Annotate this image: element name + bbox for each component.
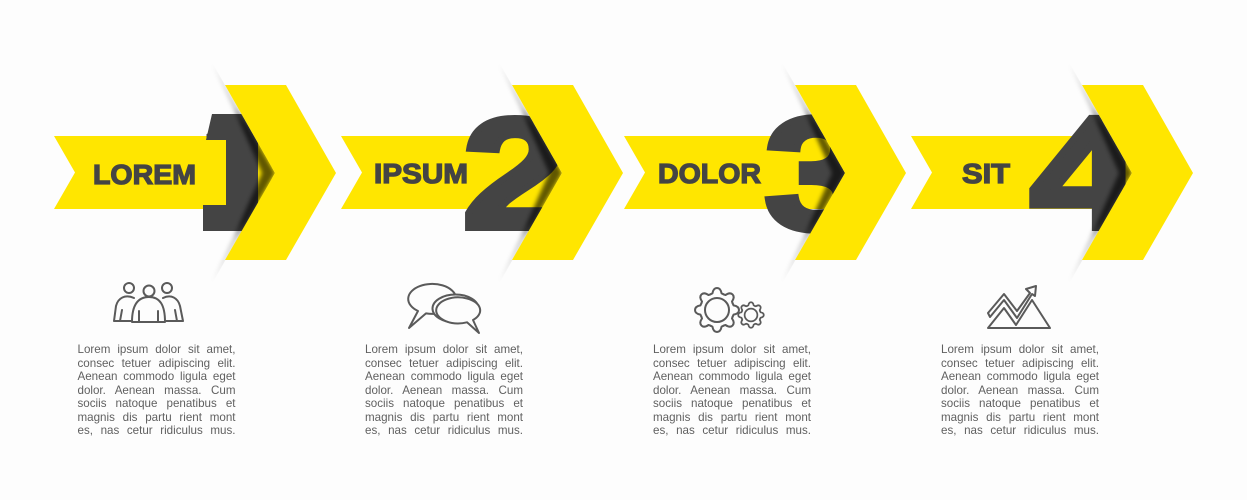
text block 2: Aenean commodo ligula eget bbox=[365, 370, 523, 383]
chevron head bbox=[1082, 85, 1193, 260]
step 3 arrow bbox=[624, 75, 906, 271]
text block 3: dolor. Aenean massa. Cum bbox=[653, 384, 811, 396]
text block 2: Lorem ipsum dolor sit amet, bbox=[365, 343, 523, 356]
fold shadow bbox=[788, 75, 845, 271]
small gear bbox=[738, 302, 764, 328]
text block 3: magnis dis partu rient mont bbox=[653, 410, 811, 424]
text block 3: sociis natoque penatibus et bbox=[653, 397, 811, 410]
text block 2: sociis natoque penatibus et bbox=[365, 397, 523, 410]
text block 4: dolor. Aenean massa. Cum bbox=[941, 384, 1099, 396]
text block 3 bbox=[653, 343, 811, 437]
number 2: 2 bbox=[462, 86, 569, 262]
text block 2: dolor. Aenean massa. Cum bbox=[365, 384, 523, 396]
label: IPSUM bbox=[374, 158, 468, 189]
text block 4: Aenean commodo ligula eget bbox=[941, 370, 1099, 383]
fold shadow bbox=[1075, 75, 1132, 271]
large gear bbox=[695, 288, 739, 332]
text block 1: magnis dis partu rient mont bbox=[78, 410, 236, 424]
number 3: 3 bbox=[764, 85, 871, 263]
fold shadow bbox=[505, 75, 562, 271]
label: DOLOR bbox=[658, 158, 761, 189]
text block 1: sociis natoque penatibus et bbox=[78, 397, 236, 410]
chevron head bbox=[225, 85, 336, 260]
text block 1: es, nas cetur ridiculus mus. bbox=[78, 424, 236, 437]
label: SIT bbox=[962, 158, 1010, 189]
text block 4 bbox=[941, 343, 1099, 437]
text block 4: consec tetuer adipiscing elit. bbox=[941, 356, 1099, 370]
text block 2: consec tetuer adipiscing elit. bbox=[365, 356, 523, 370]
ribbon tail bbox=[341, 136, 562, 209]
step 4 arrow bbox=[911, 75, 1193, 271]
ribbon tail bbox=[54, 136, 275, 209]
icon: gears bbox=[695, 288, 764, 332]
label: LOREM bbox=[93, 159, 196, 190]
ribbon tail bbox=[911, 136, 1132, 209]
text block 4: sociis natoque penatibus et bbox=[941, 397, 1099, 410]
text block 2 bbox=[365, 343, 523, 437]
text block 3: Lorem ipsum dolor sit amet, bbox=[653, 343, 811, 356]
icon: people bbox=[114, 283, 183, 322]
text block 1: Aenean commodo ligula eget bbox=[78, 370, 236, 383]
text block 3: consec tetuer adipiscing elit. bbox=[653, 356, 811, 370]
icon: mountain growth chart bbox=[988, 286, 1050, 328]
text block 4: es, nas cetur ridiculus mus. bbox=[941, 424, 1099, 437]
number 1: 1 bbox=[197, 84, 304, 262]
step 1 arrow bbox=[54, 75, 336, 271]
text block 1: consec tetuer adipiscing elit. bbox=[78, 356, 236, 370]
fold shadow bbox=[218, 75, 275, 271]
ribbon tail bbox=[624, 136, 845, 209]
step 2 arrow bbox=[341, 75, 623, 271]
text block 2: magnis dis partu rient mont bbox=[365, 410, 523, 424]
chevron head bbox=[512, 85, 623, 260]
icon: speech bubbles bbox=[408, 284, 480, 333]
text block 1: dolor. Aenean massa. Cum bbox=[78, 384, 236, 396]
text block 2: es, nas cetur ridiculus mus. bbox=[365, 424, 523, 437]
text block 4: magnis dis partu rient mont bbox=[941, 410, 1099, 424]
text block 1 bbox=[78, 343, 236, 437]
text block 1: Lorem ipsum dolor sit amet, bbox=[78, 343, 236, 356]
text block 3: Aenean commodo ligula eget bbox=[653, 370, 811, 383]
text block 3: es, nas cetur ridiculus mus. bbox=[653, 424, 811, 437]
number 4: 4 bbox=[1030, 84, 1141, 262]
text block 4: Lorem ipsum dolor sit amet, bbox=[941, 343, 1099, 356]
number 1 bbox=[203, 114, 275, 231]
chevron head bbox=[795, 85, 906, 260]
